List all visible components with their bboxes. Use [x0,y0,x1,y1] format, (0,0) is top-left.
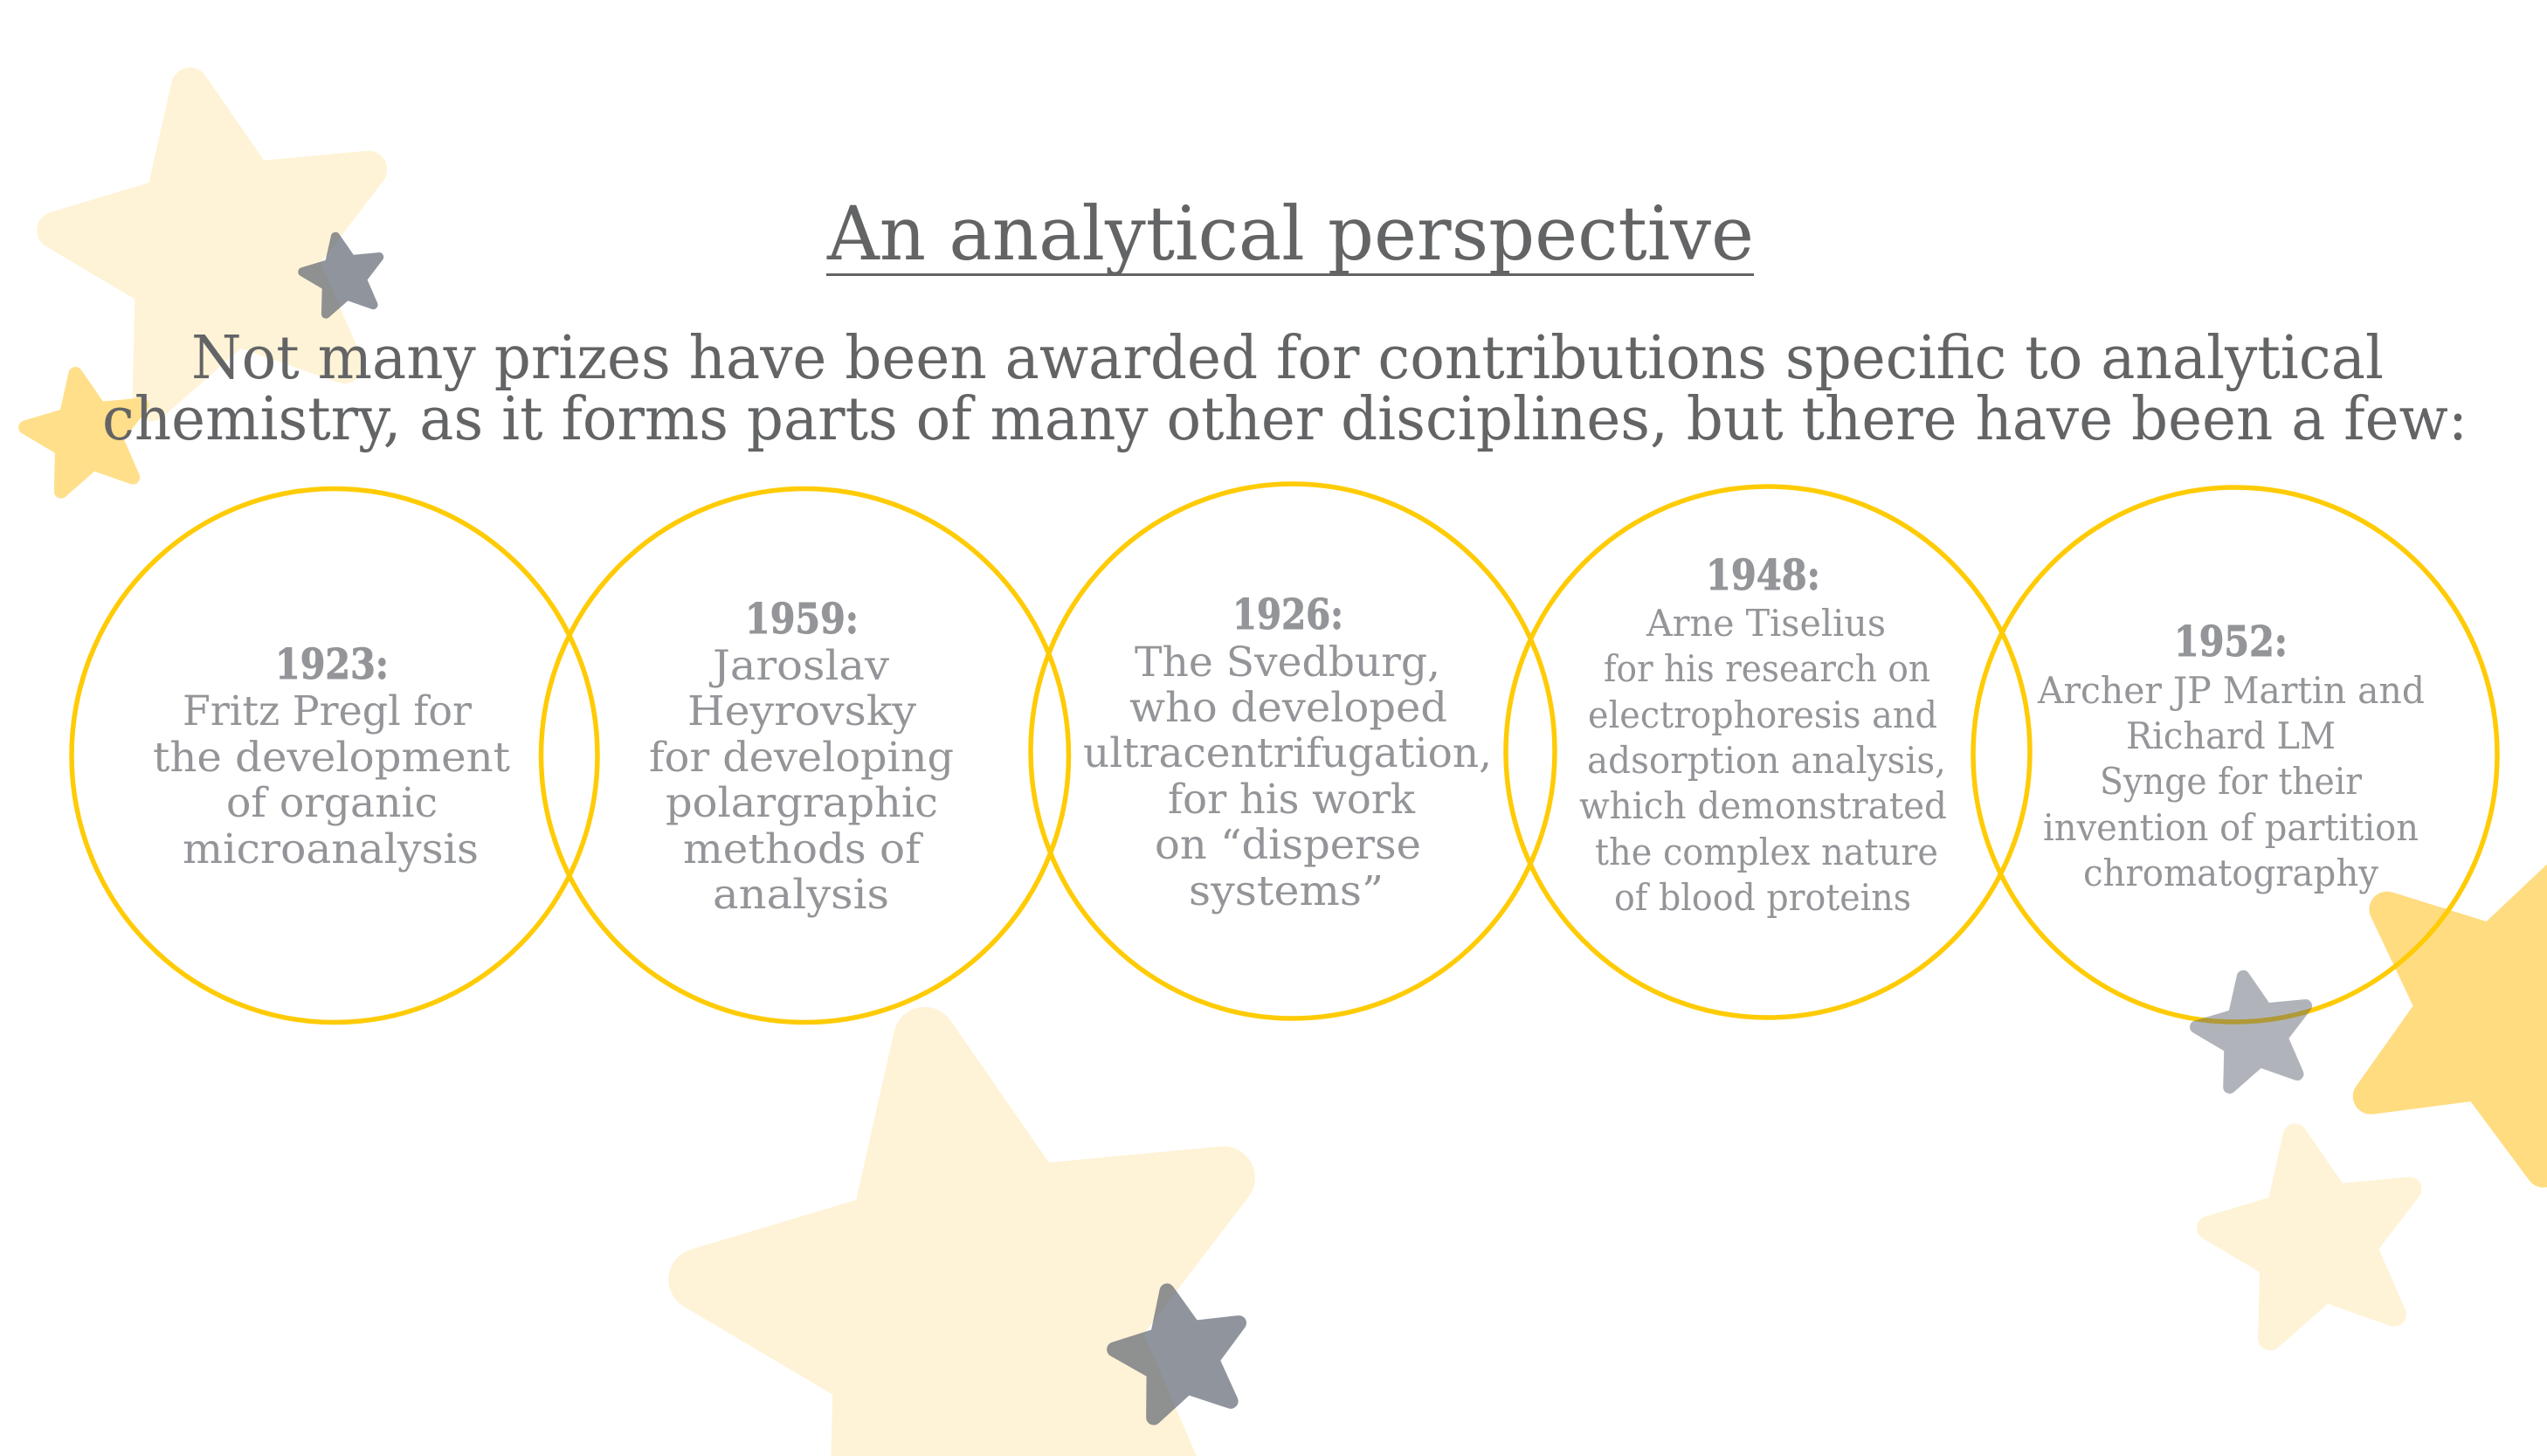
text: Arne Tiselius: Arne Tiselius [1646,602,1886,645]
text: Jaroslav Heyrovsky: methods of [683,825,924,873]
text: Fritz Pregl: of organic [226,779,438,827]
text: Jaroslav Heyrovsky: Jaroslav [709,642,889,690]
panel: 1959 circle [542,489,1069,1022]
text: Jaroslav Heyrovsky: analysis [713,871,889,919]
text: Martin and Synge [2037,669,2425,894]
year: 1926: 1926: [1232,590,1343,639]
intro text [102,324,2468,454]
text: Arne Tiselius: electrophoresis and [1588,693,1937,736]
year: 1923: 1923: [275,640,389,689]
panel: 1923 circle [72,489,597,1022]
star: grey over last circle [2181,958,2326,1099]
intro text: chemistry, as it forms parts of many other disciplines, but there have been a few: [102,385,2468,454]
intro text: Not many prizes have been awarded for contributions specific to analytical [191,324,2384,393]
text: The Svedburg: systems” [1189,867,1384,915]
text: Martin and Synge: Archer JP Martin and [2037,669,2425,712]
star: yellow large right [2353,865,2547,1188]
star: pale bottom right [2180,1102,2447,1360]
text: Martin and Synge: Synge for their [2100,760,2363,803]
text: The Svedburg: ultracentrifugation, [1083,729,1492,777]
text: The Svedburg: for his work [1168,776,1416,824]
panel: 1952 circle [1973,487,2497,1022]
title: An analytical perspective [826,191,1754,278]
year: 1959: 1959: [745,595,859,644]
text: The Svedburg: on “disperse [1155,821,1421,869]
text: Fritz Pregl: Fritz Pregl for [183,687,473,735]
text: Fritz Pregl: the development [153,734,510,782]
panel: 1926 circle [1031,484,1555,1018]
text: Fritz Pregl [153,687,510,873]
text: Arne Tiselius: for his research on [1604,647,1930,690]
text: Jaroslav Heyrovsky [649,642,954,919]
year: 1948: 1948: [1706,551,1820,600]
text: Jaroslav Heyrovsky: for developing [649,734,954,782]
text: Martin and Synge: invention of partition [2043,806,2419,849]
star: grey bottom centre [1095,1269,1263,1432]
text: Arne Tiselius: the complex nature [1595,831,1938,873]
text: Martin and Synge: chromatography [2083,852,2378,894]
star: grey top left [292,224,393,322]
year: 1952: 1952: [2174,618,2288,666]
text: Arne Tiselius [1579,602,1947,919]
star: yellow small left [9,355,163,504]
text: The Svedburg [1083,638,1492,915]
text: Jaroslav Heyrovsky: polargraphic [666,779,938,827]
star: large pale bottom centre [668,1007,1255,1456]
text: Arne Tiselius: adsorption analysis, [1587,739,1946,782]
text: Jaroslav Heyrovsky: Heyrovsky [687,687,916,735]
panel: 1948 circle [1506,486,2030,1018]
text: Arne Tiselius: of blood proteins [1614,876,1911,919]
text: Martin and Synge: Richard LM [2126,714,2336,757]
text: The Svedburg: who developed [1129,684,1447,732]
text: Fritz Pregl: microanalysis [183,825,479,873]
text: Arne Tiselius: which demonstrated [1579,784,1947,827]
star: large pale top left [11,34,426,436]
text: The Svedburg: The Svedburg, [1135,638,1440,687]
